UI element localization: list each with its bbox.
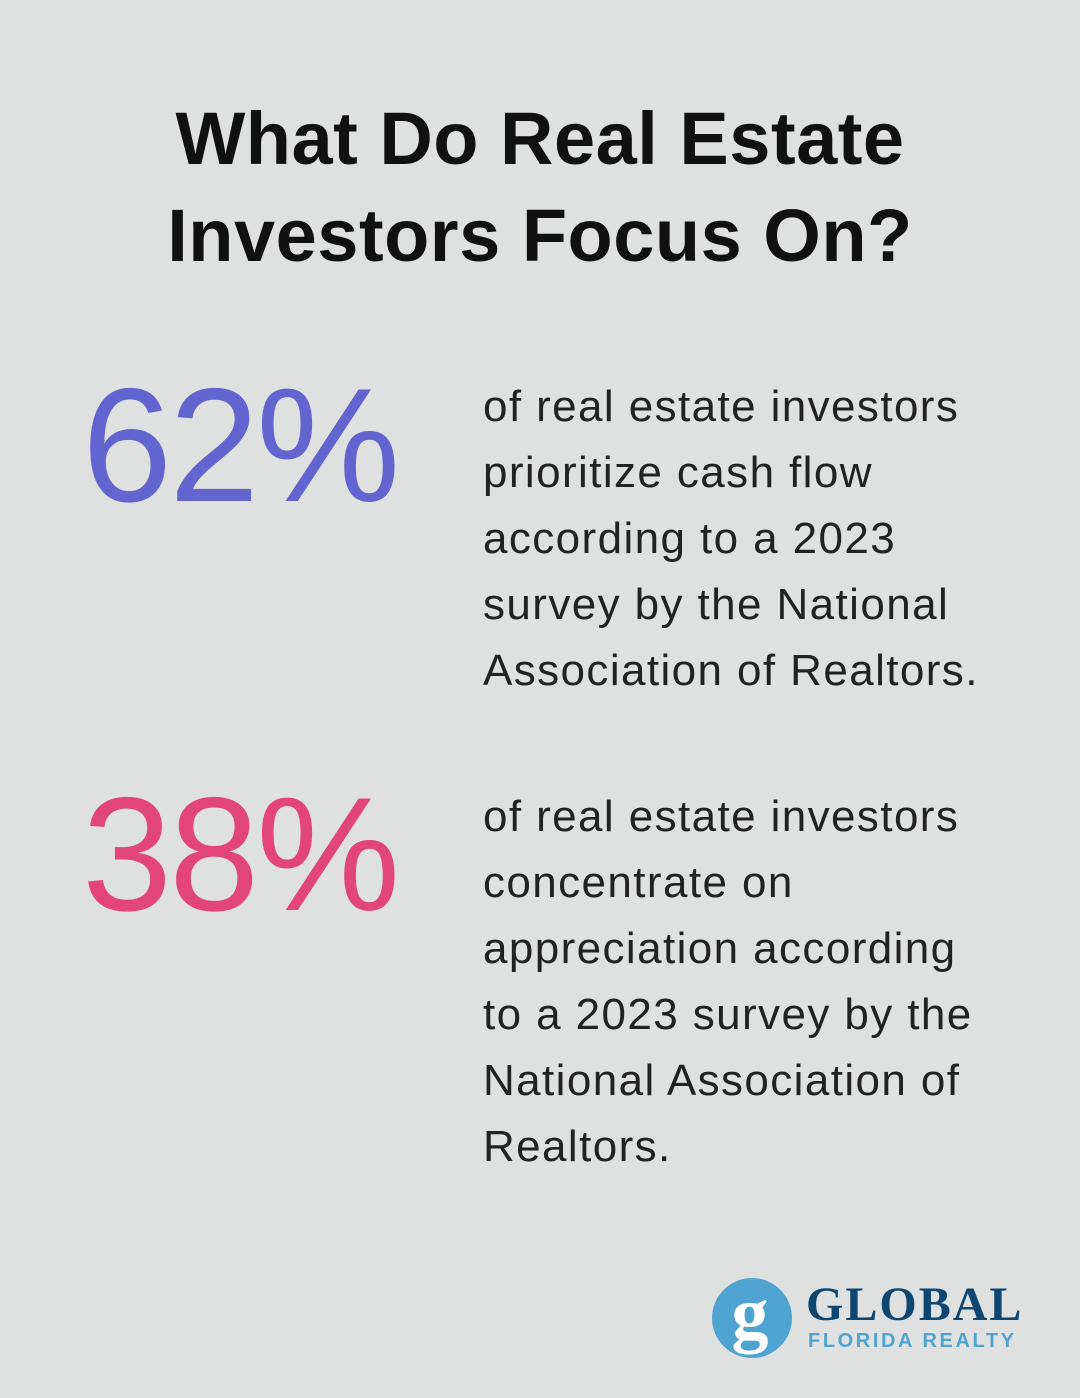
text: 62% description: according to a 2023 <box>483 514 896 563</box>
text: 38% description: concentrate on <box>483 858 794 907</box>
text: 62% description: of real estate investors <box>483 382 959 431</box>
logo icon <box>712 1276 792 1358</box>
stat: 38%: 38% <box>82 764 397 945</box>
text: 62% description: survey by the National <box>483 580 949 629</box>
stat: 62%: 62% <box>82 355 397 536</box>
logo text: GLOBAL <box>806 1278 1023 1331</box>
text: 38% description: to a 2023 survey by the <box>483 990 973 1039</box>
logo <box>712 1276 1023 1358</box>
text: 38% description: appreciation according <box>483 924 957 973</box>
text: 38% description: Realtors. <box>483 1122 672 1171</box>
text: 38% description: National Association of <box>483 1056 960 1105</box>
text: 38% description: of real estate investors <box>483 792 959 841</box>
text: 62% description <box>483 382 979 695</box>
logo: FLORIDA REALTY <box>808 1330 1017 1352</box>
title: What Do Real Estate <box>175 97 905 180</box>
text: 62% description: Association of Realtors. <box>483 646 979 695</box>
text: 38% description <box>483 792 973 1171</box>
title <box>167 97 913 277</box>
title: Investors Focus On? <box>167 194 913 277</box>
text: 62% description: prioritize cash flow <box>483 448 873 497</box>
